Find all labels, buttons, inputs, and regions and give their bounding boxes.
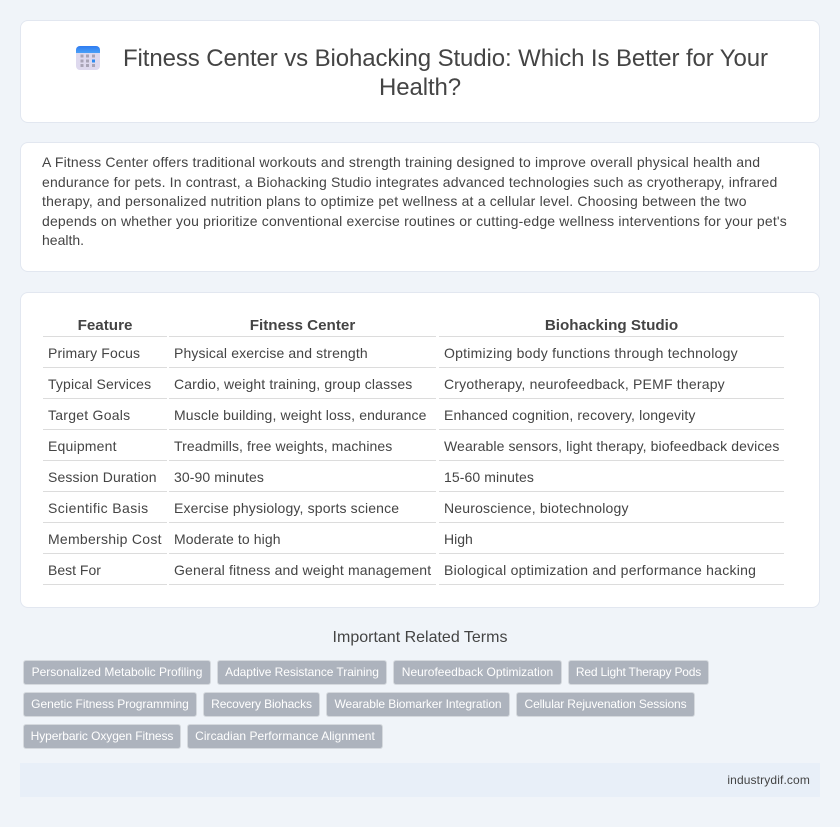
comparison table: Physical exercise and strength [174,345,368,361]
comparison table: Target Goals [48,407,130,423]
comparison table: Primary Focus [48,345,140,361]
related terms tags: Genetic Fitness Programming [31,697,189,711]
intro paragraph: therapy, and personalized nutrition plans to optimize pet wellness at a cellular level. Choosing between the two [42,193,747,209]
related terms tags: Neurofeedback Optimization [402,665,553,679]
comparison table: Optimizing body functions through technology [444,345,738,361]
header card [20,20,820,123]
comparison table: Treadmills, free weights, machines [174,438,392,454]
related terms tags: Circadian Performance Alignment [195,729,375,743]
intro card [20,142,820,272]
footer bar [20,763,820,797]
comparison table: Session Duration [48,469,157,485]
related terms heading: Important Related Terms [333,629,507,646]
intro paragraph: endurance for pets. In contrast, a Biohacking Studio integrates advanced technologies such as cryotherapy, infrared [42,174,777,190]
intro paragraph: A Fitness Center offers traditional workouts and strength training designed to improve overall physical health and [42,154,760,170]
icon: calendar [76,46,100,70]
related terms tags: Recovery Biohacks [211,697,312,711]
comparison table: Biological optimization and performance hacking [444,562,756,578]
comparison table: Muscle building, weight loss, endurance [174,407,427,423]
related terms tags: Cellular Rejuvenation Sessions [525,697,686,711]
related terms tags: Hyperbaric Oxygen Fitness [31,729,173,743]
footer source text: industrydif.com [727,773,810,787]
comparison table: 30-90 minutes [174,469,264,485]
comparison table: Scientific Basis [48,500,149,516]
comparison table [43,317,784,585]
comparison table: High [444,531,473,547]
table card [20,292,820,608]
comparison table: Cryotherapy, neurofeedback, PEMF therapy [444,376,725,392]
comparison table: Neuroscience, biotechnology [444,500,629,516]
intro paragraph: health. [42,232,84,248]
related terms tags [23,660,709,749]
comparison table: Equipment [48,438,117,454]
title [123,45,768,101]
comparison table: Fitness Center [250,317,355,334]
intro paragraph [42,154,787,248]
title: Fitness Center vs Biohacking Studio: Which Is Better for Your [123,45,768,72]
comparison table: Cardio, weight training, group classes [174,376,412,392]
comparison table: Feature [78,317,132,334]
comparison table: Enhanced cognition, recovery, longevity [444,407,696,423]
comparison table: Biohacking Studio [545,317,678,334]
comparison table: Exercise physiology, sports science [174,500,399,516]
comparison table: Wearable sensors, light therapy, biofeedback devices [444,438,779,454]
related terms tags: Wearable Biomarker Integration [334,697,502,711]
comparison table: Best For [48,562,101,578]
intro paragraph: depends on whether you prioritize conventional exercise routines or cutting-edge wellness interventions for your pet's [42,212,787,228]
related terms tags: Personalized Metabolic Profiling [32,665,202,679]
comparison table: Moderate to high [174,531,281,547]
comparison table: Typical Services [48,376,151,392]
comparison table: 15-60 minutes [444,469,534,485]
related terms tags: Red Light Therapy Pods [576,665,701,679]
comparison table: Membership Cost [48,531,162,547]
title: Health? [379,74,461,101]
related terms tags: Adaptive Resistance Training [225,665,379,679]
comparison table: General fitness and weight management [174,562,431,578]
